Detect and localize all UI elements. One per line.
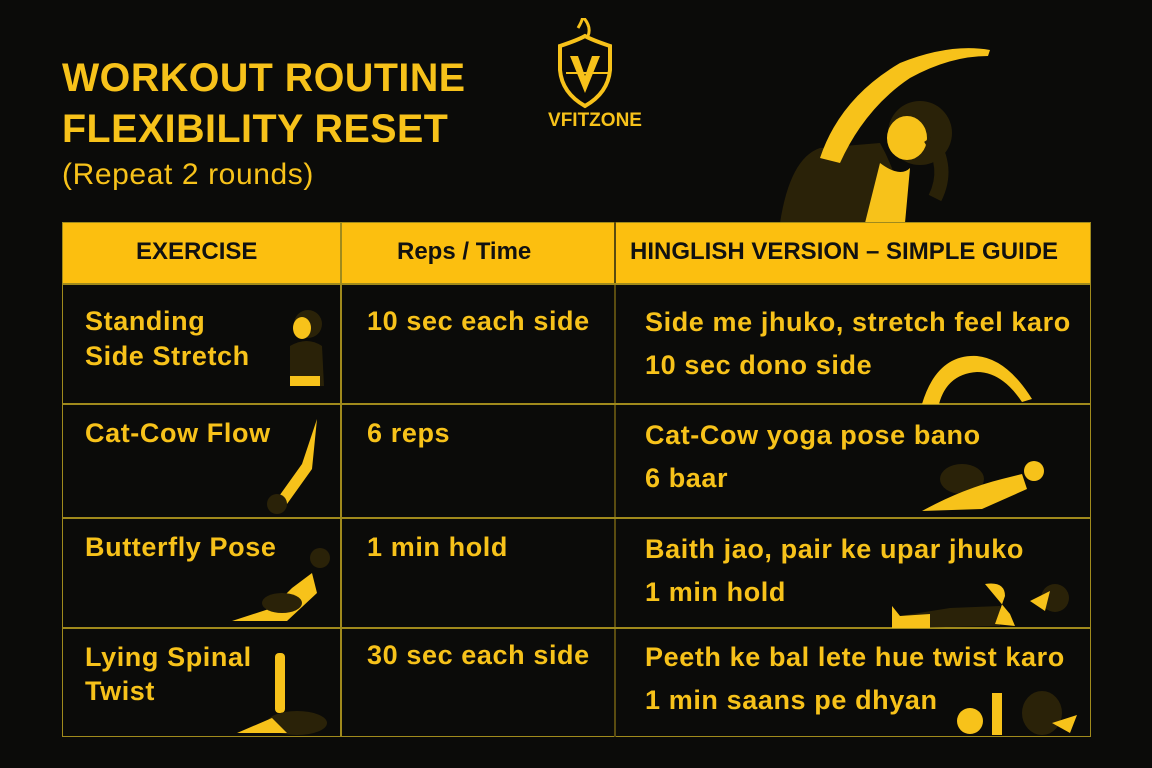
row 1: Side Stretch xyxy=(85,341,250,371)
row 1: 10 sec dono side xyxy=(645,350,872,380)
title xyxy=(62,56,466,191)
row 1: 10 sec each side xyxy=(367,306,590,336)
title: WORKOUT ROUTINE xyxy=(62,56,466,100)
header labels xyxy=(136,238,1058,265)
header labels: HINGLISH VERSION – SIMPLE GUIDE xyxy=(630,238,1058,265)
row 3: 1 min hold xyxy=(367,532,508,562)
header labels: Reps / Time xyxy=(397,238,531,265)
icon: lying twist figure xyxy=(957,691,1077,735)
row 1: Standing xyxy=(85,306,205,336)
row 1: Side me jhuko, stretch feel karo xyxy=(645,307,1071,337)
row 4: 30 sec each side xyxy=(367,640,590,670)
row 2: 6 baar xyxy=(645,463,728,493)
row 2: Cat-Cow yoga pose bano xyxy=(645,420,981,450)
icon: twist figure xyxy=(237,653,327,735)
table header xyxy=(63,223,1090,284)
row 3 xyxy=(85,532,1069,628)
header labels: EXERCISE xyxy=(136,238,257,265)
hero figure: side stretch woman xyxy=(780,48,990,222)
row 1 xyxy=(85,306,1071,404)
icon: lying figure xyxy=(922,461,1044,511)
row 3: 1 min hold xyxy=(645,577,786,607)
logo xyxy=(548,18,642,130)
icon: standing figure xyxy=(290,310,324,386)
row 2: 6 reps xyxy=(367,418,450,448)
table xyxy=(62,222,1091,737)
title: FLEXIBILITY RESET xyxy=(62,107,448,151)
row 4: Twist xyxy=(85,676,155,706)
row 4: Peeth ke bal lete hue twist karo xyxy=(645,642,1065,672)
row 3: Butterfly Pose xyxy=(85,532,276,562)
icon: seated forward fold xyxy=(892,584,1069,628)
row 3: Baith jao, pair ke upar jhuko xyxy=(645,534,1024,564)
row 4: Lying Spinal xyxy=(85,642,252,672)
icon: butterfly figure xyxy=(232,548,330,621)
title: (Repeat 2 rounds) xyxy=(62,158,314,191)
row 2 xyxy=(85,418,1044,514)
row 2: Cat-Cow Flow xyxy=(85,418,271,448)
row 4 xyxy=(85,640,1077,735)
row 4: 1 min saans pe dhyan xyxy=(645,685,938,715)
icon: cat-cow figure xyxy=(267,419,317,514)
icon: bend figure xyxy=(922,356,1032,404)
